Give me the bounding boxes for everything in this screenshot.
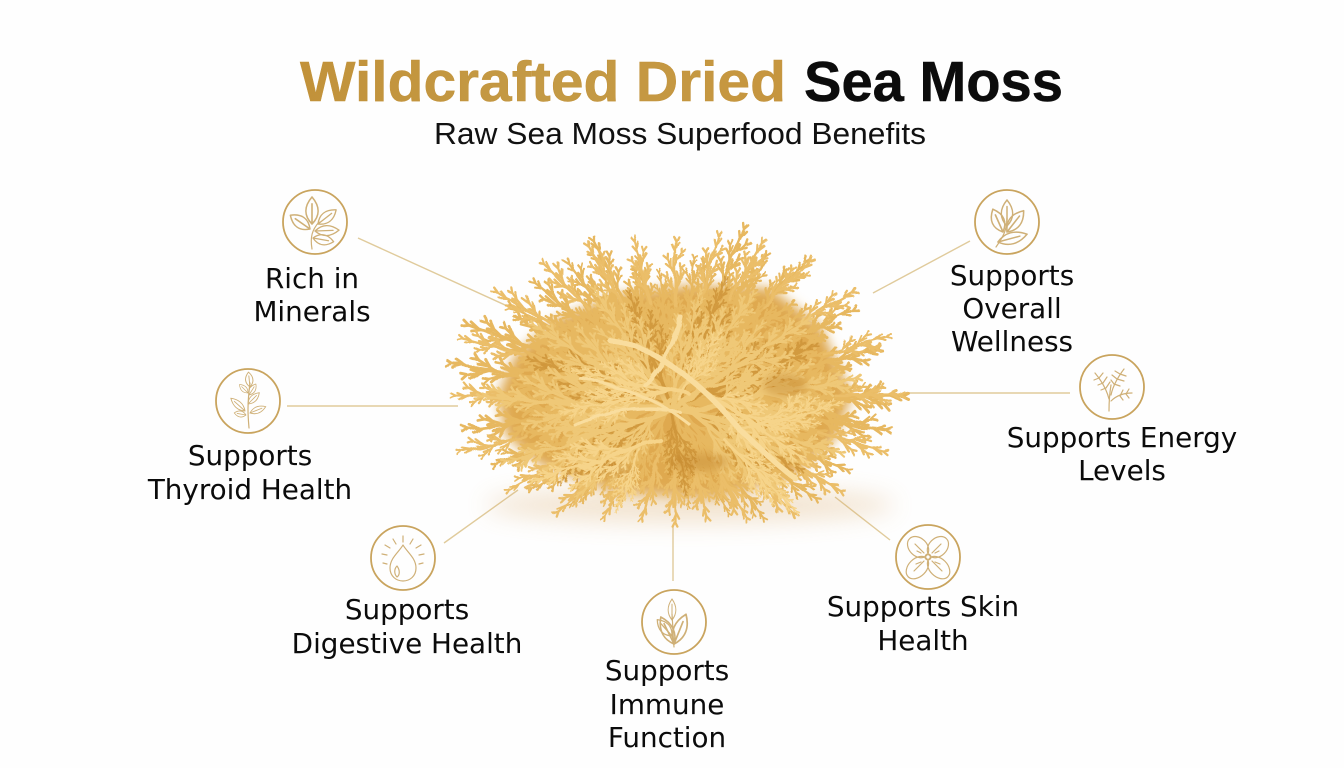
icon: branch with small leaves — [216, 369, 280, 433]
label: Supports Energy — [1007, 421, 1237, 454]
moss mid fronds — [473, 269, 869, 522]
title: Wildcrafted Dried — [300, 50, 786, 114]
icon: fern — [1080, 355, 1144, 419]
benefit: digestive health — [292, 526, 522, 660]
label: Minerals — [253, 295, 371, 328]
label: Supports — [345, 593, 469, 626]
benefit: energy levels — [1007, 355, 1237, 487]
benefit: overall wellness — [950, 190, 1074, 358]
label: Thyroid Health — [147, 473, 352, 506]
icon: four-petal flower — [896, 525, 960, 589]
label: Health — [877, 624, 969, 657]
moss dark hollows — [595, 373, 807, 477]
label: Immune — [610, 688, 724, 721]
benefit: skin health — [827, 525, 1019, 657]
moss outer spiky ring — [450, 228, 905, 527]
sea moss illustration — [439, 209, 909, 543]
label: Supports — [950, 259, 1074, 292]
title: Sea Moss — [804, 50, 1063, 114]
title — [300, 50, 1063, 114]
label: Supports — [188, 439, 312, 472]
moss dark streaks — [516, 267, 831, 507]
benefit: thyroid health — [147, 369, 352, 506]
label: Supports Skin — [827, 590, 1019, 623]
icon: upright leaves — [642, 590, 706, 654]
connector lines — [287, 238, 1070, 581]
icon: leafy sprig — [283, 190, 347, 254]
icon: droplet with rays — [371, 526, 435, 590]
moss front fronds — [521, 320, 849, 528]
benefit: immune function — [605, 590, 729, 754]
label: Wellness — [951, 325, 1073, 358]
label: Function — [608, 721, 726, 754]
moss body — [498, 285, 852, 498]
label: Supports — [605, 654, 729, 687]
moss back fronds — [439, 209, 909, 543]
icon: three leaves — [975, 190, 1039, 254]
soft shadow under moss — [485, 487, 895, 523]
label: Rich in — [265, 262, 359, 295]
label: Digestive Health — [292, 627, 522, 660]
label: Levels — [1078, 454, 1166, 487]
subtitle: Raw Sea Moss Superfood Benefits — [434, 116, 926, 151]
label: Overall — [962, 292, 1062, 325]
moss highlighted central strands — [575, 316, 795, 478]
benefit: rich in minerals — [253, 190, 371, 328]
